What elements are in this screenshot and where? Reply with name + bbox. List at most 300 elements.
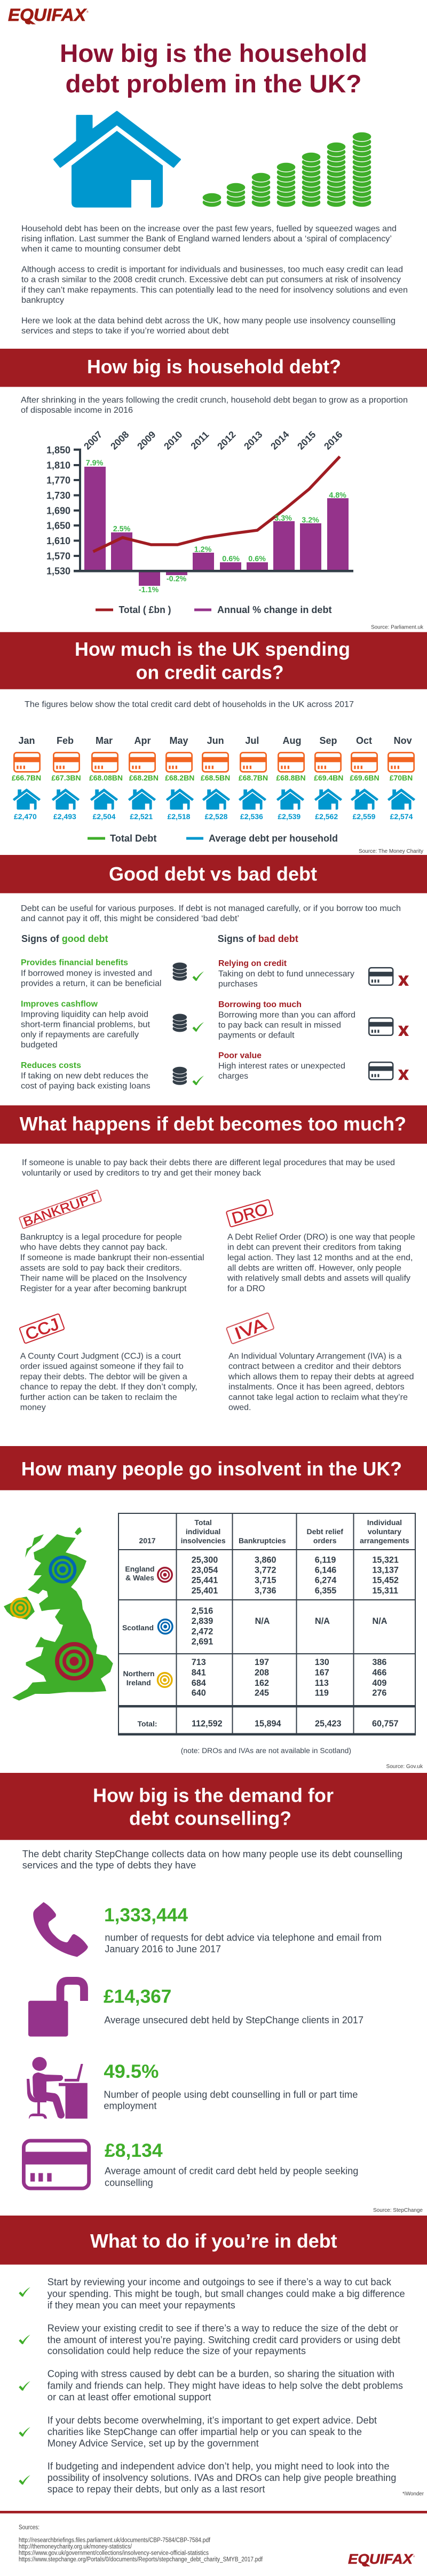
sources list: https://www.gov.uk/government/collections/insolvency-service-official-statistics bbox=[19, 2550, 209, 2557]
row: Scotland bbox=[122, 1606, 388, 1647]
stat: unsecured debt bbox=[28, 1981, 363, 2037]
row: England and Wales: 3,736 bbox=[255, 1586, 276, 1596]
stat: requests bbox=[33, 1902, 382, 1957]
row: England and Wales bbox=[125, 1555, 399, 1596]
block: DRO text: all debts are written off. However, only people bbox=[227, 1263, 401, 1273]
average household values: £2,518 bbox=[168, 812, 191, 821]
block: IVA text: cannot take legal action to reclaim what they’re bbox=[228, 1393, 408, 1402]
section banner: counselling bbox=[0, 1773, 427, 1840]
stat: requests: January 2016 to June 2017 bbox=[105, 1944, 221, 1954]
average household values: £2,574 bbox=[390, 812, 413, 821]
chart: purple bars bbox=[84, 467, 349, 586]
item: provides financial benefits: provides a return, it can be beneficial bbox=[21, 979, 161, 988]
month labels: Jan bbox=[18, 735, 35, 746]
row: Northern Ireland: 713 bbox=[192, 1658, 206, 1667]
intro text: Household debt has been on the increase over the past few years, fuelled by squeezed wages and bbox=[21, 224, 397, 233]
table: insolvency figures bbox=[118, 1513, 416, 1735]
row: Scotland: Scotland bbox=[122, 1623, 154, 1632]
chart: monthly credit card debt bbox=[12, 735, 415, 844]
row: England and Wales: 25,401 bbox=[192, 1586, 218, 1596]
row: England and Wales: 23,054 bbox=[192, 1565, 218, 1575]
chart: legend bbox=[96, 604, 332, 615]
item: reduces costs: If taking on new debt reduces the bbox=[21, 1071, 148, 1080]
row: England and Wales: 15,321 bbox=[372, 1555, 399, 1565]
chart: year labels: 2016 bbox=[322, 429, 345, 452]
table header: individual bbox=[186, 1527, 220, 1536]
stat: employment: 49.5% bbox=[104, 2061, 159, 2082]
row: Northern Ireland: 113 bbox=[315, 1678, 329, 1688]
item: provides financial benefits: Provides financial benefits bbox=[21, 959, 128, 968]
stat: credit card debt bbox=[23, 2140, 358, 2188]
stat: employment: Number of people using debt counselling in full or part time bbox=[104, 2089, 358, 2100]
tip: insolvency solutions: possibility of insolvency solutions. IVAs and DROs can help give people breathing bbox=[48, 2472, 396, 2483]
sources list: https://www.stepchange.org/Portals/0/documents/Reports/stepchange_debt_charity_SMYB_2017.pdf bbox=[19, 2557, 263, 2563]
table header: orders bbox=[313, 1536, 337, 1545]
item: poor value bbox=[218, 1051, 409, 1081]
month labels: Jul bbox=[245, 735, 259, 746]
stat: employment bbox=[27, 2057, 358, 2119]
month labels bbox=[18, 735, 412, 746]
month labels: Mar bbox=[96, 735, 113, 746]
sources list: http://researchbriefings.files.parliament.uk/documents/CBP-7584/CBP-7584.pdf bbox=[19, 2538, 211, 2544]
tip: expert advice: charities like StepChange can offer impartial help or you can speak to the bbox=[48, 2426, 362, 2437]
text: counselling intro: The debt charity StepChange collects data on how many people use its debt counselling bbox=[22, 1849, 402, 1859]
map target: England and Wales bbox=[57, 1644, 91, 1678]
source: Parliament: Source: Parliament.uk bbox=[371, 624, 424, 631]
block: DRO text bbox=[227, 1232, 415, 1293]
chart: y axis labels: 1,850 bbox=[46, 445, 70, 455]
logo: Equifax footer: EQUIFAX bbox=[348, 2551, 414, 2567]
item: borrowing too much: payments or default bbox=[218, 1031, 295, 1040]
average household values: £2,521 bbox=[130, 812, 153, 821]
row: England and Wales: 6,355 bbox=[315, 1586, 336, 1596]
row: Northern Ireland: 162 bbox=[255, 1678, 269, 1688]
row: England and Wales: 25,300 bbox=[192, 1555, 218, 1565]
stat: requests: number of requests for debt advice via telephone and email from bbox=[105, 1933, 382, 1943]
average household values: £2,536 bbox=[240, 812, 263, 821]
tip: review income: Start by reviewing your income and outgoings to see if there’s a way to cut back bbox=[48, 2277, 392, 2288]
chart: percent labels: 2.5% bbox=[113, 525, 131, 533]
block: DRO text: legal action. They last 12 months and at the end, bbox=[227, 1253, 413, 1262]
chart: year labels: 2011 bbox=[188, 429, 211, 452]
sources list: Sources: bbox=[19, 2525, 39, 2531]
stamp: DRO: DRO bbox=[230, 1200, 270, 1228]
row: total bbox=[137, 1719, 399, 1729]
icons: credit cards bbox=[14, 752, 414, 772]
item: relying on credit: Relying on credit bbox=[218, 959, 287, 968]
section banner: credit cards: How much is the UK spending bbox=[75, 638, 350, 660]
block: CCJ text: further action can be taken to reclaim the bbox=[20, 1393, 177, 1402]
table header: arrangements bbox=[360, 1536, 409, 1545]
row: Northern Ireland: 130 bbox=[315, 1658, 329, 1667]
month labels: Aug bbox=[283, 735, 301, 746]
item: improves cashflow bbox=[21, 1000, 204, 1050]
intro text bbox=[21, 224, 408, 336]
total debt values: £68.8BN bbox=[276, 774, 306, 782]
chart: year labels: 2008 bbox=[108, 429, 131, 452]
sources list bbox=[19, 2525, 263, 2563]
table header: Debt relief bbox=[306, 1527, 343, 1536]
row: Northern Ireland: 119 bbox=[315, 1688, 329, 1698]
chart: y axis labels: 1,730 bbox=[46, 490, 70, 501]
stat: employment: employment bbox=[104, 2101, 156, 2111]
row: Scotland: 2,691 bbox=[192, 1637, 213, 1647]
row: England and Wales: England bbox=[125, 1565, 155, 1573]
chart: year labels: 2015 bbox=[295, 429, 318, 452]
chart: year labels: 2013 bbox=[242, 429, 265, 452]
intro text: Here we look at the data behind debt across the UK, how many people use insolvency counselling bbox=[21, 316, 396, 325]
chart: percent labels: -1.1% bbox=[139, 586, 159, 594]
tip: review credit: Review your existing credit to see if there’s a way to reduce the size of the debt or bbox=[48, 2323, 398, 2334]
chart: y axis labels: 1,610 bbox=[46, 536, 70, 546]
chart: percent labels: 3.2% bbox=[302, 516, 319, 524]
item: poor value: High interest rates or unexpected bbox=[218, 1062, 345, 1071]
total debt values: £68.2BN bbox=[129, 774, 159, 782]
text: credit card intro: The figures below show the total credit card debt of households in the UK across 2017 bbox=[25, 700, 354, 709]
item: borrowing too much: Borrowing too much bbox=[218, 1000, 302, 1009]
chart: y axis labels: 1,690 bbox=[46, 505, 70, 516]
heading: bad debt: Signs of bad debt bbox=[218, 933, 298, 944]
block: IVA text: instalments. Once it has been agreed, debtors bbox=[228, 1383, 405, 1392]
intro text: if they can’t make repayments. This can potentially lead to the need for insolvency solutions and even bbox=[21, 286, 408, 295]
stamp: IVA: IVA bbox=[232, 1314, 269, 1344]
logo: Equifax header: EQUIFAX bbox=[8, 5, 87, 25]
row: England and Wales: 6,274 bbox=[315, 1576, 336, 1585]
average household values: £2,539 bbox=[278, 812, 301, 821]
section banner: too much debt bbox=[0, 1105, 427, 1144]
block: CCJ text: order issued against someone if they fail to bbox=[20, 1362, 184, 1371]
item: improves cashflow: Improves cashflow bbox=[21, 1000, 98, 1009]
chart: axes bbox=[74, 449, 353, 572]
stat: requests: 1,333,444 bbox=[104, 1905, 188, 1926]
chart: year labels: 2014 bbox=[268, 429, 291, 452]
chart: year labels bbox=[82, 429, 345, 452]
block: DRO text: for a DRO bbox=[227, 1284, 265, 1293]
item: reduces costs bbox=[21, 1061, 204, 1091]
title: debt problem in the UK? bbox=[65, 70, 362, 98]
item: improves cashflow: budgeted bbox=[21, 1041, 58, 1050]
text: household debt intro bbox=[21, 396, 408, 415]
map: land masses bbox=[4, 1527, 113, 1701]
row: Northern Ireland: 841 bbox=[192, 1668, 206, 1678]
section banner: good vs bad: Good debt vs bad debt bbox=[109, 863, 317, 885]
total debt values: £70BN bbox=[390, 774, 413, 782]
chart: year labels: 2010 bbox=[162, 429, 185, 452]
average household values: £2,528 bbox=[205, 812, 228, 821]
tip: insolvency solutions: space to repay their debts, but only as a last resort bbox=[48, 2484, 265, 2495]
tip: share the situation: Coping with stress caused by debt can be a burden, so sharing the situation with bbox=[48, 2369, 394, 2379]
chart: y axis labels: 1,530 bbox=[46, 566, 70, 577]
section banner: credit cards: on credit cards? bbox=[136, 662, 284, 684]
icon: person at desk bbox=[27, 2057, 88, 2119]
block: IVA text: contract between a creditor and their debtors bbox=[228, 1362, 401, 1371]
chart: year labels: 2007 bbox=[82, 429, 105, 452]
panel: signs of good debt bbox=[21, 933, 204, 1091]
average household values bbox=[14, 812, 413, 821]
row: Northern Ireland: 684 bbox=[192, 1678, 206, 1688]
row: Scotland: N/A bbox=[255, 1616, 270, 1626]
average household values: £2,562 bbox=[315, 812, 338, 821]
text: too much debt intro: voluntarily or used by creditors to try and get their money back bbox=[22, 1168, 262, 1177]
total debt values: £68.5BN bbox=[201, 774, 230, 782]
section banner: credit cards bbox=[0, 632, 427, 689]
source: Gov.uk: Source: Gov.uk bbox=[386, 1763, 423, 1770]
stat: unsecured debt: Average unsecured debt held by StepChange clients in 2017 bbox=[104, 2015, 363, 2025]
note: table: (note: DROs and IVAs are not available in Scotland) bbox=[181, 1747, 351, 1755]
row: England and Wales: 3,772 bbox=[255, 1565, 276, 1575]
row: Scotland: 2,516 bbox=[192, 1606, 213, 1616]
row: Northern Ireland: 167 bbox=[315, 1668, 329, 1678]
item: improves cashflow: Improving liquidity can help avoid bbox=[21, 1010, 148, 1019]
block: CCJ text: chance to repay the debt. If they don’t comply, bbox=[20, 1383, 197, 1392]
chart: percent labels: 3.3% bbox=[274, 514, 292, 523]
chart: percent labels: 4.8% bbox=[329, 491, 346, 500]
intro text: Although access to credit is important for individuals and businesses, too much easy credit can lead bbox=[21, 265, 403, 274]
tip: share the situation: family and friends can help. They might have ideas to help solve the debt problems bbox=[48, 2380, 403, 2391]
row: Northern Ireland: 276 bbox=[372, 1688, 386, 1698]
row: Scotland: N/A bbox=[315, 1616, 330, 1626]
tip: expert advice bbox=[19, 2415, 377, 2449]
block: CCJ text bbox=[20, 1352, 197, 1412]
row: Northern Ireland: Northern bbox=[123, 1669, 155, 1678]
chart: household debt bars and line bbox=[46, 429, 353, 615]
section banner: what to do: What to do if you’re in debt bbox=[90, 2230, 337, 2252]
tip: review credit: the amount of interest you’re paying. Switching credit card providers or using debt bbox=[48, 2335, 400, 2345]
stat: unsecured debt: £14,367 bbox=[104, 1986, 171, 2007]
chart: percent labels: 1.2% bbox=[194, 546, 212, 554]
stat: credit card debt: counselling bbox=[105, 2177, 153, 2188]
panel: signs of bad debt bbox=[218, 933, 409, 1081]
row: total: 25,423 bbox=[315, 1719, 342, 1729]
item: poor value: charges bbox=[218, 1072, 248, 1081]
icon: house bbox=[54, 112, 180, 208]
title bbox=[60, 40, 367, 98]
stamp: IVA bbox=[226, 1312, 275, 1346]
section banner: counselling: debt counselling? bbox=[129, 1808, 291, 1829]
chart: total debt line bbox=[93, 457, 340, 552]
item: reduces costs: Reduces costs bbox=[21, 1061, 81, 1070]
chart: y axis labels: 1,810 bbox=[46, 460, 70, 471]
table header: voluntary bbox=[368, 1527, 401, 1536]
stat: credit card debt: £8,134 bbox=[105, 2140, 163, 2161]
stamp: CCJ: CCJ bbox=[23, 1315, 61, 1344]
text: good vs bad intro: and cannot pay it off, this might be considered ‘bad debt’ bbox=[21, 914, 239, 923]
row: England and Wales: 6,146 bbox=[315, 1565, 336, 1575]
section banner: How big is household debt?: How big is household debt? bbox=[87, 356, 341, 378]
tip: expert advice: If your debts become overwhelming, it’s important to get expert advice. Debt bbox=[48, 2415, 377, 2425]
logo: Equifax footer: ® bbox=[413, 2555, 415, 2558]
block: DRO text: in debt can prevent their creditors from taking bbox=[227, 1243, 401, 1252]
block: bankruptcy text bbox=[20, 1232, 204, 1293]
chart: percent labels: -0.2% bbox=[167, 575, 187, 584]
month labels: May bbox=[169, 735, 188, 746]
month labels: Sep bbox=[319, 735, 337, 746]
icon: growing coin stacks bbox=[202, 132, 371, 207]
total debt values: £66.7BN bbox=[12, 774, 41, 782]
item: poor value: Poor value bbox=[218, 1051, 262, 1061]
text: too much debt intro: If someone is unable to pay back their debts there are different legal procedures that may be used bbox=[22, 1158, 395, 1167]
month labels: Feb bbox=[57, 735, 74, 746]
section banner: good vs bad bbox=[0, 855, 427, 893]
block: bankruptcy text: Their name will be placed on the Insolvency bbox=[20, 1274, 187, 1283]
block: DRO text: A Debt Relief Order (DRO) is one way that people bbox=[227, 1232, 415, 1242]
total debt values: £69.4BN bbox=[314, 774, 343, 782]
chart: y axis labels: 1,570 bbox=[46, 551, 70, 562]
legend bbox=[88, 833, 338, 844]
month labels: Jun bbox=[207, 735, 224, 746]
row: England and Wales: 3,860 bbox=[255, 1555, 276, 1565]
table grid bbox=[118, 1513, 416, 1735]
text: good vs bad intro bbox=[21, 904, 401, 923]
row: England and Wales: 15,452 bbox=[372, 1576, 399, 1585]
intro text: bankruptcy bbox=[21, 296, 64, 305]
row: England and Wales: 13,137 bbox=[372, 1565, 399, 1575]
table header: Individual bbox=[367, 1518, 402, 1527]
sources list: http://themoneycharity.org.uk/money-statistics/ bbox=[19, 2544, 132, 2550]
row: Northern Ireland: 386 bbox=[372, 1658, 386, 1667]
total debt values: £68.08BN bbox=[89, 774, 123, 782]
row: Northern Ireland: Ireland bbox=[126, 1678, 151, 1687]
chart: y axis labels: 1,650 bbox=[46, 520, 70, 531]
tip: share the situation: or can at least offer emotional support bbox=[48, 2392, 211, 2402]
intro text: rising inflation. Last summer the Bank of England warned lenders about a ‘spiral of complacency’ bbox=[21, 234, 392, 244]
icon: credit card bbox=[23, 2141, 90, 2188]
block: CCJ text: A County Court Judgment (CCJ) is a court bbox=[20, 1352, 181, 1361]
row: Scotland: N/A bbox=[373, 1616, 388, 1626]
text: too much debt intro bbox=[22, 1158, 395, 1177]
table header: Total bbox=[194, 1518, 212, 1527]
chart: percent labels: 0.6% bbox=[248, 555, 266, 563]
section banner: too much debt: What happens if debt becomes too much? bbox=[20, 1113, 406, 1135]
chart: year labels: 2009 bbox=[135, 429, 158, 452]
row: total: 15,894 bbox=[255, 1719, 281, 1729]
row: Northern Ireland bbox=[123, 1658, 386, 1698]
text: good vs bad intro: Debt can be useful for various purposes. If debt is not managed carefully, or if you borrow too much bbox=[21, 904, 401, 913]
tip: review credit: consolidation could help reduce the size of your repayments bbox=[48, 2345, 306, 2356]
row: Northern Ireland: 640 bbox=[192, 1688, 206, 1698]
block: CCJ text: money bbox=[20, 1403, 46, 1412]
heading: good debt: Signs of good debt bbox=[21, 933, 108, 944]
icon: phone bbox=[33, 1902, 88, 1957]
source: Money Charity: Source: The Money Charity bbox=[359, 848, 424, 854]
source: StepChange: Source: StepChange bbox=[373, 2207, 423, 2213]
table header: insolvencies bbox=[181, 1536, 226, 1545]
row: England and Wales: 25,441 bbox=[192, 1576, 218, 1585]
block: bankruptcy text: If someone is made bankrupt their non-essential bbox=[20, 1253, 204, 1262]
item: reduces costs: cost of paying back existing loans bbox=[21, 1082, 151, 1091]
row: total: 112,592 bbox=[192, 1719, 223, 1729]
tip: review income bbox=[19, 2277, 405, 2311]
stat: credit card debt: Average amount of credit card debt held by people seeking bbox=[105, 2166, 358, 2177]
chart: legend: Annual % change in debt bbox=[217, 604, 332, 615]
tip: review credit bbox=[19, 2323, 400, 2356]
month labels: Apr bbox=[135, 735, 151, 746]
title: How big is the household bbox=[60, 40, 367, 68]
row: total: Total: bbox=[137, 1719, 157, 1728]
tip: expert advice: Money Advice Service, set up by the government bbox=[48, 2438, 259, 2449]
text: household debt intro: of disposable income in 2016 bbox=[21, 406, 133, 415]
source: iWonder: *iWonder bbox=[402, 2491, 424, 2497]
legend: Average debt per household bbox=[209, 833, 338, 844]
text: counselling intro: services and the type of debts they have bbox=[22, 1860, 196, 1871]
table header: Bankruptcies bbox=[239, 1536, 286, 1545]
stamp: BANKRUPT: BANKRUPT bbox=[21, 1190, 100, 1230]
block: IVA text: An Individual Voluntary Arrangement (IVA) is a bbox=[228, 1352, 402, 1361]
table header bbox=[139, 1518, 409, 1545]
row: Northern Ireland: 208 bbox=[255, 1668, 269, 1678]
section banner: counselling: How big is the demand for bbox=[93, 1785, 334, 1806]
table header: 2017 bbox=[139, 1536, 156, 1545]
row: Northern Ireland: 466 bbox=[372, 1668, 386, 1678]
logo: Equifax header: ® bbox=[86, 10, 89, 14]
chart: y axis labels bbox=[46, 445, 70, 577]
block: bankruptcy text: Register for a year after becoming bankrupt bbox=[20, 1284, 187, 1293]
section banner: what to do bbox=[0, 2216, 427, 2265]
month labels: Oct bbox=[356, 735, 372, 746]
tip: insolvency solutions: If budgeting and independent advice don’t help, you might need to look into the bbox=[48, 2461, 390, 2471]
item: borrowing too much: Borrowing more than you can afford bbox=[218, 1010, 355, 1019]
legend: Total Debt bbox=[110, 833, 156, 844]
item: improves cashflow: short-term financial problems, but bbox=[21, 1020, 151, 1029]
map target: Scotland bbox=[50, 1557, 75, 1582]
block: IVA text: owed. bbox=[228, 1403, 251, 1412]
text: household debt intro: After shrinking in the years following the credit crunch, household debt began to grow as a proportion bbox=[21, 396, 408, 405]
block: DRO text: with relatively small debts and assets will qualify bbox=[227, 1274, 410, 1283]
item: borrowing too much: to pay back can result in missed bbox=[218, 1020, 341, 1030]
total debt values: £68.7BN bbox=[239, 774, 268, 782]
row: England and Wales: & Wales bbox=[125, 1574, 154, 1582]
total debt values: £67.3BN bbox=[51, 774, 81, 782]
map: UK with region targets bbox=[4, 1527, 113, 1701]
block: bankruptcy text: who have debts they cannot pay back. bbox=[20, 1243, 168, 1252]
month labels: Nov bbox=[394, 735, 412, 746]
item: provides financial benefits: If borrowed money is invested and bbox=[21, 969, 152, 978]
tip: share the situation bbox=[19, 2369, 403, 2402]
tip: review income: your spending. This might be tough, but small changes could make a big difference bbox=[48, 2288, 405, 2299]
chart: year labels: 2012 bbox=[215, 429, 238, 452]
item: relying on credit: purchases bbox=[218, 980, 258, 989]
average household values: £2,493 bbox=[53, 812, 76, 821]
row: Northern Ireland: 409 bbox=[372, 1678, 386, 1688]
block: bankruptcy text: Bankruptcy is a legal procedure for people bbox=[20, 1232, 182, 1242]
tip: review income: if they mean you can meet your repayments bbox=[48, 2300, 235, 2311]
section banner: insolvency: How many people go insolvent in the UK? bbox=[21, 1458, 402, 1480]
chart: percent labels: 7.9% bbox=[86, 459, 104, 468]
average household values: £2,470 bbox=[14, 812, 37, 821]
chart: legend: Total ( £bn ) bbox=[118, 604, 171, 615]
block: CCJ text: repay their debts. The debtor will be given a bbox=[20, 1372, 187, 1381]
chart: percent labels: 0.6% bbox=[222, 555, 240, 563]
total debt values: £69.6BN bbox=[350, 774, 379, 782]
icons: houses bbox=[13, 789, 415, 810]
block: IVA text: which allows them to repay their debts at agreed bbox=[228, 1372, 414, 1381]
total debt values: £68.2BN bbox=[165, 774, 194, 782]
row: Scotland: 2,472 bbox=[192, 1627, 213, 1636]
item: relying on credit: Taking on debt to fund unnecessary bbox=[218, 969, 354, 978]
row: England and Wales: 15,311 bbox=[372, 1586, 398, 1596]
intro text: services and steps to take if you’re worried about debt bbox=[21, 327, 229, 336]
map target: Northern Ireland bbox=[11, 1599, 30, 1617]
average household values: £2,504 bbox=[93, 812, 116, 821]
block: bankruptcy text: assets are sold to pay back their creditors. bbox=[20, 1263, 182, 1273]
total debt values bbox=[12, 774, 413, 782]
tip: insolvency solutions bbox=[19, 2461, 396, 2495]
chart: y axis labels: 1,770 bbox=[46, 475, 70, 486]
row: Northern Ireland: 245 bbox=[255, 1688, 269, 1698]
average household values: £2,559 bbox=[353, 812, 376, 821]
row: total: 60,757 bbox=[372, 1719, 399, 1729]
intro text: to a crash similar to the 2008 credit crunch. Excessive debt can put consumers at risk of insolvency bbox=[21, 276, 401, 285]
